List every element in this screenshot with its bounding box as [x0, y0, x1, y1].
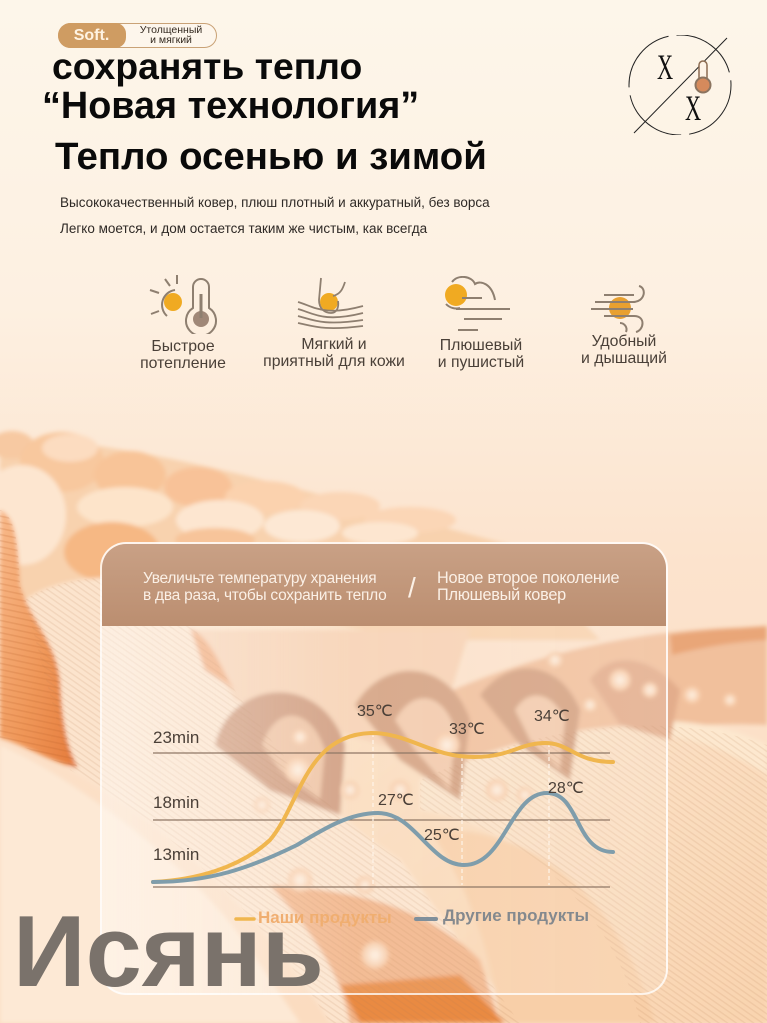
logo mark	[628, 35, 732, 135]
caption: soft and skin friendly: приятный для кожи	[263, 353, 405, 370]
icon: sun and thermometer	[150, 275, 217, 334]
right strand	[430, 628, 767, 770]
caption: plush and fluffy: Плюшевый	[440, 337, 522, 354]
temperature labels	[357, 703, 584, 844]
icon: finger on soft layers	[298, 278, 364, 329]
panel header	[100, 542, 672, 626]
legend	[236, 906, 589, 927]
lower left cream	[0, 745, 300, 1023]
caption: comfortable and breathable	[581, 333, 667, 367]
grid lines and axis labels: 18min	[153, 793, 199, 812]
tuft band	[0, 440, 600, 640]
lower central orange	[270, 885, 500, 1023]
caption: soft and skin friendly: Мягкий и	[301, 336, 367, 353]
temperature labels: 35℃	[357, 703, 393, 720]
badge text: и мягкий	[150, 34, 192, 46]
temperature labels: 33℃	[449, 721, 485, 738]
badge label: Soft.	[74, 26, 109, 44]
woven hoops	[215, 692, 345, 815]
badge label	[58, 22, 126, 48]
logo mark: X	[657, 48, 673, 87]
caption: fast warming: Быстрое	[151, 338, 215, 355]
header right text: Новое второе поколение	[437, 569, 619, 587]
badge text	[140, 24, 202, 46]
bubbles	[254, 652, 737, 969]
title line 2: “Новая технология”	[42, 85, 419, 127]
grid lines and axis labels: 23min	[153, 728, 199, 747]
caption: fast warming	[140, 338, 226, 372]
logo mark: X	[685, 89, 701, 128]
blue series: other products	[153, 793, 613, 882]
caption: comfortable and breathable: Удобный	[592, 333, 656, 350]
caption: plush and fluffy: и пушистый	[438, 354, 524, 371]
fabric texture	[25, 578, 767, 1023]
description line 2: Легко моется, и дом остается таким же чистым, как всегда	[60, 221, 427, 236]
header left text: Увеличьте температуру хранения	[143, 570, 376, 587]
icon: wind	[591, 285, 645, 333]
grid lines and axis labels: 13min	[153, 845, 199, 864]
orange strand left	[0, 510, 78, 768]
grid lines and axis labels	[153, 728, 610, 887]
header right text	[437, 569, 619, 604]
caption: soft and skin friendly	[263, 336, 405, 370]
icon: cloud and sun	[445, 276, 510, 331]
legend: Наши продукты	[258, 908, 392, 927]
legend: Другие продукты	[443, 906, 589, 925]
caption: plush and fluffy	[438, 337, 524, 371]
watermark: Исянь	[13, 896, 324, 1008]
temperature labels: 34℃	[534, 708, 570, 725]
orange series: our products	[153, 733, 613, 882]
caption: comfortable and breathable: и дышащий	[581, 350, 667, 367]
header left text: в два раза, чтобы сохранить тепло	[143, 587, 387, 604]
header slash: /	[408, 572, 416, 603]
temperature labels: 27℃	[378, 792, 414, 809]
caption: fast warming: потепление	[140, 355, 226, 372]
panel: temperature chart	[100, 542, 668, 995]
temperature labels: 28℃	[548, 780, 584, 797]
description line 1: Высококачественный ковер, плюш плотный и аккуратный, без ворса	[60, 195, 490, 210]
header right text: Плюшевый ковер	[437, 586, 566, 604]
temperature labels: 25℃	[424, 827, 460, 844]
title line 3: Тепло осенью и зимой	[55, 135, 487, 178]
header left text	[143, 570, 387, 604]
upper centre peach	[195, 630, 470, 760]
title line 1: сохранять тепло	[52, 45, 362, 87]
badge text: Утолщенный	[140, 24, 202, 36]
cream strand	[25, 579, 640, 1023]
badge: Soft	[58, 23, 217, 48]
